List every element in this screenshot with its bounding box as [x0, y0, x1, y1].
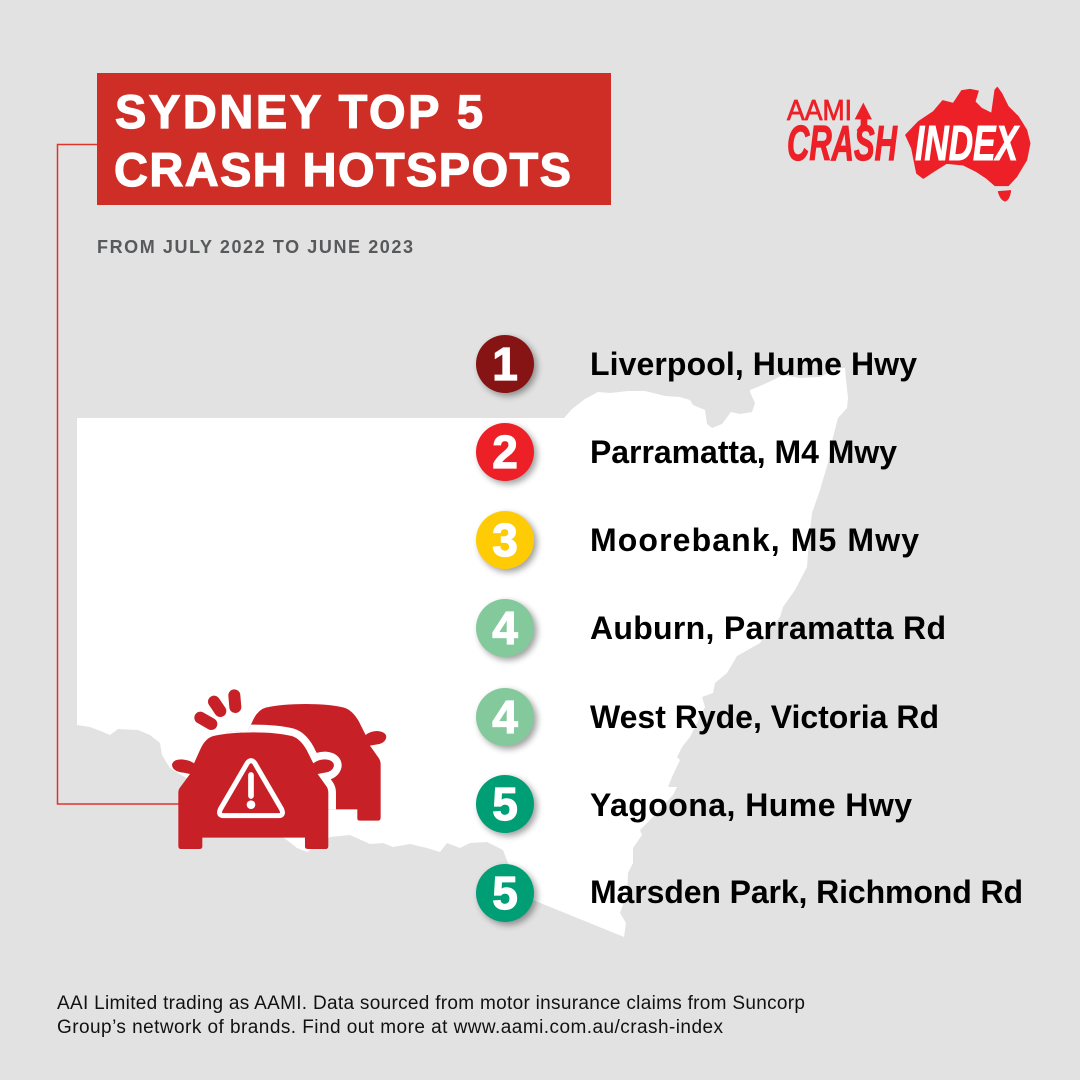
ranking 4: West Ryde [476, 688, 939, 749]
ranking 3: Moorebank [476, 511, 919, 572]
front car [172, 732, 334, 849]
ranking 4: West Ryde: West Ryde, Victoria Rd [590, 699, 939, 735]
map: New South Wales outline [77, 368, 848, 937]
logo wordmark: AAMI Crash [787, 95, 898, 171]
ranking 1: Liverpool [476, 335, 917, 396]
logo: Australia map with Index [906, 87, 1030, 201]
ranking 3: Moorebank: 3 [492, 514, 518, 566]
ranking 4: Auburn: Auburn, Parramatta Rd [590, 610, 946, 646]
footer source note: AAI Limited trading as AAMI. Data sourced from motor insurance claims from Suncorp [57, 993, 805, 1014]
ranking 1: Liverpool: Liverpool, Hume Hwy [590, 346, 917, 382]
ranking 2: Parramatta: 2 [492, 426, 518, 478]
warning triangle [220, 761, 282, 816]
ranking 1: Liverpool: 1 [492, 338, 518, 390]
ranking 5: Yagoona [476, 775, 912, 836]
ranking 5: Yagoona: 5 [492, 778, 518, 830]
icon: two cars with warning sign [172, 695, 386, 849]
connector line [58, 144, 180, 804]
ranking 2: Parramatta [476, 423, 897, 484]
title banner: CRASH HOTSPOTS [114, 143, 571, 196]
subtitle: date range: FROM JULY 2022 TO JUNE 2023 [97, 237, 413, 257]
impact sparks [200, 695, 235, 724]
ranking 2: Parramatta: Parramatta, M4 Mwy [590, 434, 897, 470]
logo wordmark: AAMI Crash: AAMI [787, 95, 852, 127]
ranking 4: Auburn [476, 599, 946, 660]
logo: AAMI Crash Index [787, 87, 1030, 201]
ranking 4: Auburn: 4 [492, 602, 518, 654]
rear car [224, 704, 386, 821]
ranking 5: Yagoona: Yagoona, Hume Hwy [590, 787, 912, 823]
ranking 3: Moorebank: Moorebank, M5 Mwy [590, 522, 919, 558]
title banner: SYDNEY TOP 5 [115, 85, 483, 138]
halo separating the cars [226, 724, 342, 810]
title banner [97, 73, 611, 205]
ranking 5: Marsden Park [476, 864, 1023, 925]
ranking 4: West Ryde: 4 [492, 691, 518, 743]
logo: Australia map with Index: INDEX [915, 117, 1020, 171]
footer source note [57, 993, 805, 1038]
ranking 5: Marsden Park: 5 [492, 867, 518, 919]
ranking 5: Marsden Park: Marsden Park, Richmond Rd [590, 874, 1023, 910]
footer source note: Group’s network of brands. Find out more at www.aami.com.au/crash-index [57, 1017, 724, 1038]
logo wordmark: AAMI Crash: CRASH [787, 117, 898, 171]
